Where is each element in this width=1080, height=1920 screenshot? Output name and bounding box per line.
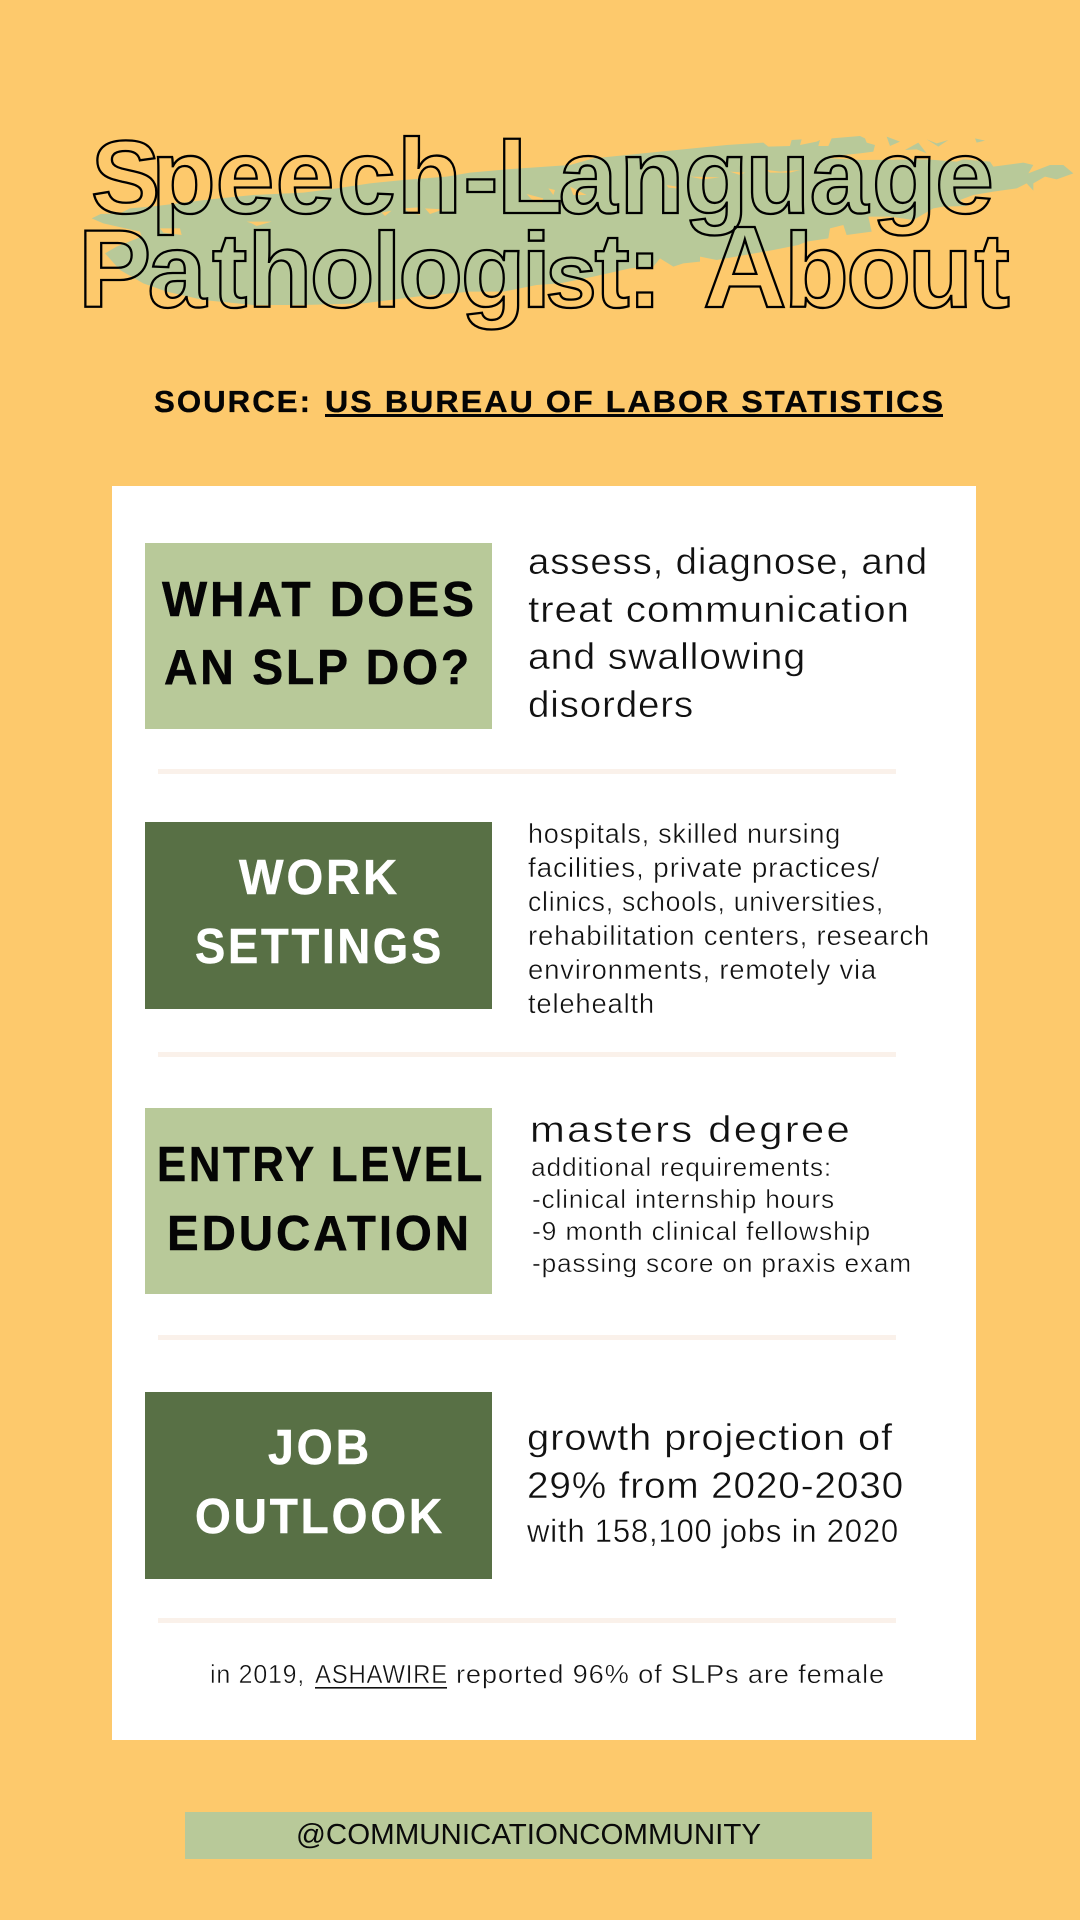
title: o (310, 212, 374, 330)
label box: entry level education (145, 1108, 492, 1294)
title (78, 115, 1010, 332)
label box: job outlook: JOB (268, 1421, 372, 1475)
title: P (78, 208, 151, 331)
title: t (974, 212, 1010, 330)
label box: job outlook: OUTLOOK (195, 1490, 445, 1544)
source line: US BUREAU OF LABOR STATISTICS (325, 384, 945, 419)
footer handle bar (185, 1812, 872, 1859)
title: a (558, 118, 618, 236)
footnote: ASHAWIRE statistic: ASHAWIRE (315, 1659, 448, 1689)
description: work settings list: hospitals, skilled nursing (528, 818, 841, 849)
title: s (546, 225, 597, 327)
label box: job outlook (145, 1392, 492, 1579)
title: : (627, 212, 662, 330)
title: h (397, 118, 462, 236)
title: e (276, 118, 334, 236)
footer handle bar: @COMMUNICATIONCOMMUNITY (296, 1819, 761, 1851)
label box: work settings (145, 822, 492, 1009)
description: work settings list: telehealth (528, 988, 655, 1019)
title: a (148, 212, 208, 330)
title: i (522, 212, 551, 330)
description: work settings list: clinics, schools, universities, (528, 886, 884, 917)
title: p (151, 118, 216, 236)
title: t (594, 212, 630, 330)
title: u (746, 118, 810, 236)
section: entry level education (145, 1108, 912, 1294)
title: l (372, 212, 401, 330)
description: work settings list: facilities, private practices/ (528, 852, 880, 883)
label box: work settings: WORK (239, 851, 400, 905)
section: work settings (145, 818, 930, 1019)
title: c (337, 118, 396, 236)
description: education requirements: -9 month clinical fellowship (532, 1216, 871, 1246)
title: u (908, 212, 973, 330)
title: b (784, 212, 849, 330)
description: education requirements (530, 1109, 912, 1278)
label box: what does an SLP do: AN SLP DO? (164, 641, 472, 695)
title: e (216, 118, 274, 236)
label box: work settings: SETTINGS (195, 920, 444, 974)
description: work settings list (528, 818, 930, 1019)
title: n (620, 118, 684, 236)
description: job growth numbers (526, 1417, 904, 1549)
description: education requirements: -passing score on praxis exam (532, 1248, 912, 1278)
title: A (703, 202, 787, 332)
title: h (248, 212, 312, 330)
title: a (810, 118, 870, 236)
description: education requirements: -clinical internship hours (532, 1184, 835, 1214)
title: o (398, 212, 463, 330)
description: work settings list: rehabilitation centers, research (528, 920, 930, 951)
label box: entry level education: EDUCATION (167, 1207, 472, 1261)
source line: SOURCE: (154, 384, 312, 419)
title: g (872, 118, 936, 236)
footnote: ASHAWIRE statistic: reported 96% of SLPs are female (456, 1659, 885, 1689)
section: job outlook (145, 1392, 904, 1579)
title: t (212, 212, 247, 330)
section: what does an SLP do (145, 541, 928, 729)
description: what an SLP does: treat communication (528, 589, 910, 630)
title: e (935, 118, 994, 236)
title: g (461, 212, 525, 330)
description: job growth numbers: growth projection of (527, 1417, 893, 1458)
description: what an SLP does: assess, diagnose, and (528, 541, 928, 582)
white content panel (112, 486, 976, 1740)
label box: entry level education: ENTRY LEVEL (157, 1138, 485, 1192)
title: S (91, 120, 160, 236)
title: o (846, 212, 911, 330)
description: what an SLP does: and swallowing (528, 636, 806, 677)
description: work settings list: environments, remotely via (528, 954, 877, 985)
footnote: ASHAWIRE statistic: in 2019, (210, 1659, 305, 1689)
title: g (684, 118, 748, 236)
green brush stroke behind title (92, 136, 1073, 305)
description: what an SLP does: disorders (528, 684, 694, 725)
description: education requirements: masters degree (530, 1109, 852, 1150)
description: education requirements: additional requirements: (531, 1152, 832, 1182)
description: what an SLP does (528, 541, 928, 725)
label box: what does an SLP do: WHAT DOES (162, 573, 477, 627)
title: L (497, 115, 563, 236)
description: job growth numbers: with 158,100 jobs in 2020 (526, 1513, 899, 1549)
label box: what does an SLP do (145, 543, 492, 729)
footnote: ASHAWIRE statistic (210, 1659, 885, 1689)
title: - (463, 118, 499, 236)
description: job growth numbers: 29% from 2020-2030 (527, 1465, 904, 1506)
